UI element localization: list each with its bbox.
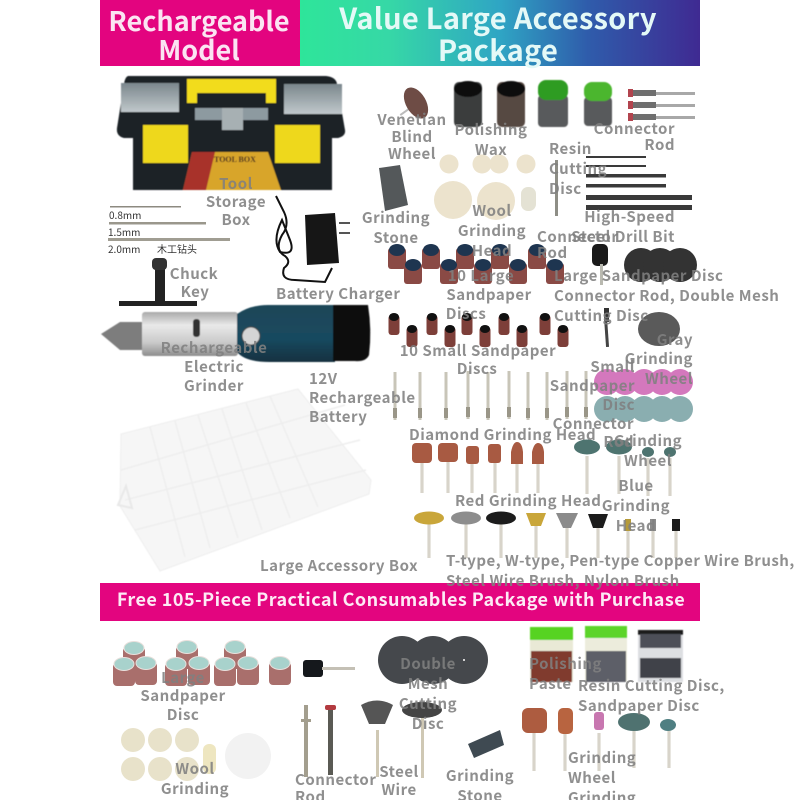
red grinding heads [412,442,544,493]
label: Wool Grinding bonus: Grinding [161,778,229,799]
small mandrel [604,308,609,347]
label: Grinding Wheel Grinding bonus: Wheel [568,767,616,788]
label: Double Mesh Cutting Disc bonus: Cutting [399,693,457,714]
label: 10 Large Sandpaper Discs: Sandpaper [446,284,532,305]
label: Diamond Grinding Head: Diamond Grinding Head [409,424,596,445]
bonus connector rods [301,705,336,777]
label: Resin Cutting Disc: Resin [549,138,592,159]
tool storage box [117,76,345,190]
label: High-Speed Steel Drill Bit: High-Speed [584,206,675,227]
label: Battery Charger: Battery Charger [276,283,400,304]
label: Steel Wire bonus: Wire [381,779,417,800]
label: Polishing Wax: Wax [475,139,507,160]
wool grinding heads [434,154,536,220]
label: 10 Small Sandpaper Discs: Discs [457,358,497,379]
label: Gray Grinding Wheel: Grinding [625,348,693,369]
small wood drill bits with sizes [108,206,230,256]
label: Resin Cutting Disc, Sandpaper Disc bonus: Sandpaper Disc [578,695,700,716]
label: Tool Storage Box: Storage [206,191,266,212]
label: Gray Grinding Wheel: Wheel [645,368,693,389]
product labels [140,109,795,800]
wire brushes [414,512,680,558]
label: Large Accessory Box: Large Accessory Box [260,555,418,576]
label: Large Sandpaper Disc bonus: Disc [167,704,199,725]
small sandpaper discs [594,369,693,422]
label: Tool Storage Box: Tool [219,173,253,194]
label: Steel Wire bonus: Steel [379,761,419,782]
label: Grinding Wheel Grinding bonus: Grinding [568,747,636,768]
large accessory box [118,389,371,571]
label: Resin Cutting Disc, Sandpaper Disc bonus: Resin Cutting Disc, [578,675,725,696]
label: Small Sandpaper Disc: Small [590,356,635,377]
label: Connector Rod top: Connector [594,118,675,139]
label: Large Sandpaper Disc bonus: Sandpaper [140,685,226,706]
label: Rechargeable Electric Grinder: Grinder [184,375,244,396]
10 small sandpaper bands [388,313,568,347]
label: Grinding Wheel: Wheel [624,450,672,471]
label: Polishing Paste: Paste [529,673,572,694]
banner: Value Large Accessory Package: Package [438,28,558,70]
label: Venetian Blind Wheel: Wheel [388,143,436,164]
label: Wool Grinding bonus: Wool [175,758,215,779]
label: Small Sandpaper Disc: Sandpaper [550,375,635,396]
label: Double Mesh Cutting Disc bonus: Mesh [408,673,448,694]
label: Rechargeable Electric Grinder: Rechargeable [161,337,267,358]
tool storage box: TOOL BOX [214,155,256,164]
label: Polishing Paste: Polishing [529,653,602,674]
battery charger [276,196,350,282]
label: 12V Rechargeable Battery: Rechargeable [309,387,416,408]
banner: Rechargeable Model: Model [158,29,240,68]
label: 12V Rechargeable Battery: 12V [309,368,338,389]
10 large sandpaper bands [388,244,564,284]
label: Resin Cutting Disc: Disc [549,178,582,199]
label: Gray Grinding Wheel: Gray [657,329,693,350]
label: 10 Large Sandpaper Discs: Discs [446,303,486,324]
rechargeable electric grinder [101,305,370,362]
label: Tool Storage Box: Box [221,209,251,230]
label: Venetian Blind Wheel: Venetian [376,109,447,130]
bonus grinding stone [468,730,504,758]
label: Blue Grinding Head: Grinding [602,495,670,516]
blue grinding wheels [574,440,676,496]
bonus wool discs [121,728,271,781]
label: 10 Small Sandpaper Discs: 10 Small Sandpaper [400,340,556,361]
label: Blue Grinding Head: Head [616,515,656,536]
label: wire brush types: T-type, W-type, Pen-type Copper Wire Brush, [446,550,795,571]
label: Grinding Wheel: Grinding [614,430,682,451]
label: 12V Rechargeable Battery: Battery [309,406,367,427]
diamond grinding heads [393,371,588,420]
banner: Rechargeable Model: Rechargeable [108,0,290,39]
double mesh cutting discs [624,248,697,282]
label: Rechargeable Electric Grinder: Electric [184,356,244,377]
label: Red Grinding Head: Red Grinding Head [455,490,601,511]
banner: free consumables package: Free 105-Piece Practical Consumables Package with Purchase [117,586,685,612]
bonus polishing paste bottles [530,627,573,682]
label: Connector Rod lower: Connector [553,413,634,434]
label: Connector Rod middle: Rod [537,242,568,263]
connector rods [628,89,695,121]
bonus double mesh discs [378,636,488,684]
label: Small Sandpaper Disc: Disc [602,394,635,415]
bonus sandpaper bands [113,640,291,686]
bonus mandrel [303,660,355,677]
label: Large Sandpaper Disc, Connector Rod, Double Mesh Cutting Disc: Large Sandpaper Disc [554,265,723,286]
flap wheel [399,83,433,123]
high speed steel drill bits [586,156,692,210]
banner: Rechargeable Model [100,0,300,68]
label: Resin Cutting Disc: Cutting [549,158,607,179]
label: Double Mesh Cutting Disc bonus: Double [400,653,456,674]
label: Large Sandpaper Disc bonus: Large [161,667,205,688]
label: Chuck Key: Key [181,281,209,302]
label: Grinding Stone bonus: Grinding [446,765,514,786]
label: Grinding Stone: Grinding [362,207,430,228]
label: Large Sandpaper Disc, Connector Rod, Double Mesh Cutting Disc: Cutting Disc [554,305,649,326]
label: Large Sandpaper Disc, Connector Rod, Double Mesh Cutting Disc: Connector Rod, Double Mesh [554,285,779,306]
small wood drill bits with sizes: 2.0mm [108,241,140,256]
grinding stone [379,165,408,211]
label: Chuck Key: Chuck [170,263,218,284]
label: wire brush types: Steel Wire Brush, Nylon Brush [446,570,680,591]
label: Connector Rod lower: Rod [603,431,634,452]
label: 10 Large Sandpaper Discs: 10 Large [448,265,514,286]
label: Double Mesh Cutting Disc bonus: Disc [412,713,444,734]
small wood drill bits with sizes: 0.8mm [109,207,141,222]
small wood drill bits with sizes: 木工钻头 [157,241,197,256]
resin disc bottles [538,80,612,127]
bonus resin disc bottles [585,626,683,682]
label: Venetian Blind Wheel: Blind [391,126,433,147]
sanding mandrel [592,244,608,285]
label: Wool Grinding Head: Head [472,240,512,261]
label: Blue Grinding Head: Blue [618,475,654,496]
label: Connector Rod top: Rod [644,134,675,155]
bonus grinding heads [522,708,676,771]
label: Connector Rod middle: Connector [537,226,618,247]
label: Grinding Stone: Stone [373,227,419,248]
chuck key [119,258,197,306]
label: High-Speed Steel Drill Bit: Steel Drill Bit [571,226,675,247]
label: Wool Grinding Head: Grinding [458,220,526,241]
label: Wool Grinding Head: Wool [472,200,512,221]
polishing wax bottles [454,81,525,127]
label: Connector Rod bonus: Connector [295,769,376,790]
small wood drill bits with sizes: 1.5mm [108,224,140,239]
label: Polishing Wax: Polishing [455,119,527,140]
resin cutting disc mandrel [555,160,558,216]
banner: free consumables package [100,583,700,621]
bonus steel wire brushes [361,700,442,778]
banner: Value Large Accessory Package [300,0,700,70]
gray grinding wheel [638,312,680,346]
